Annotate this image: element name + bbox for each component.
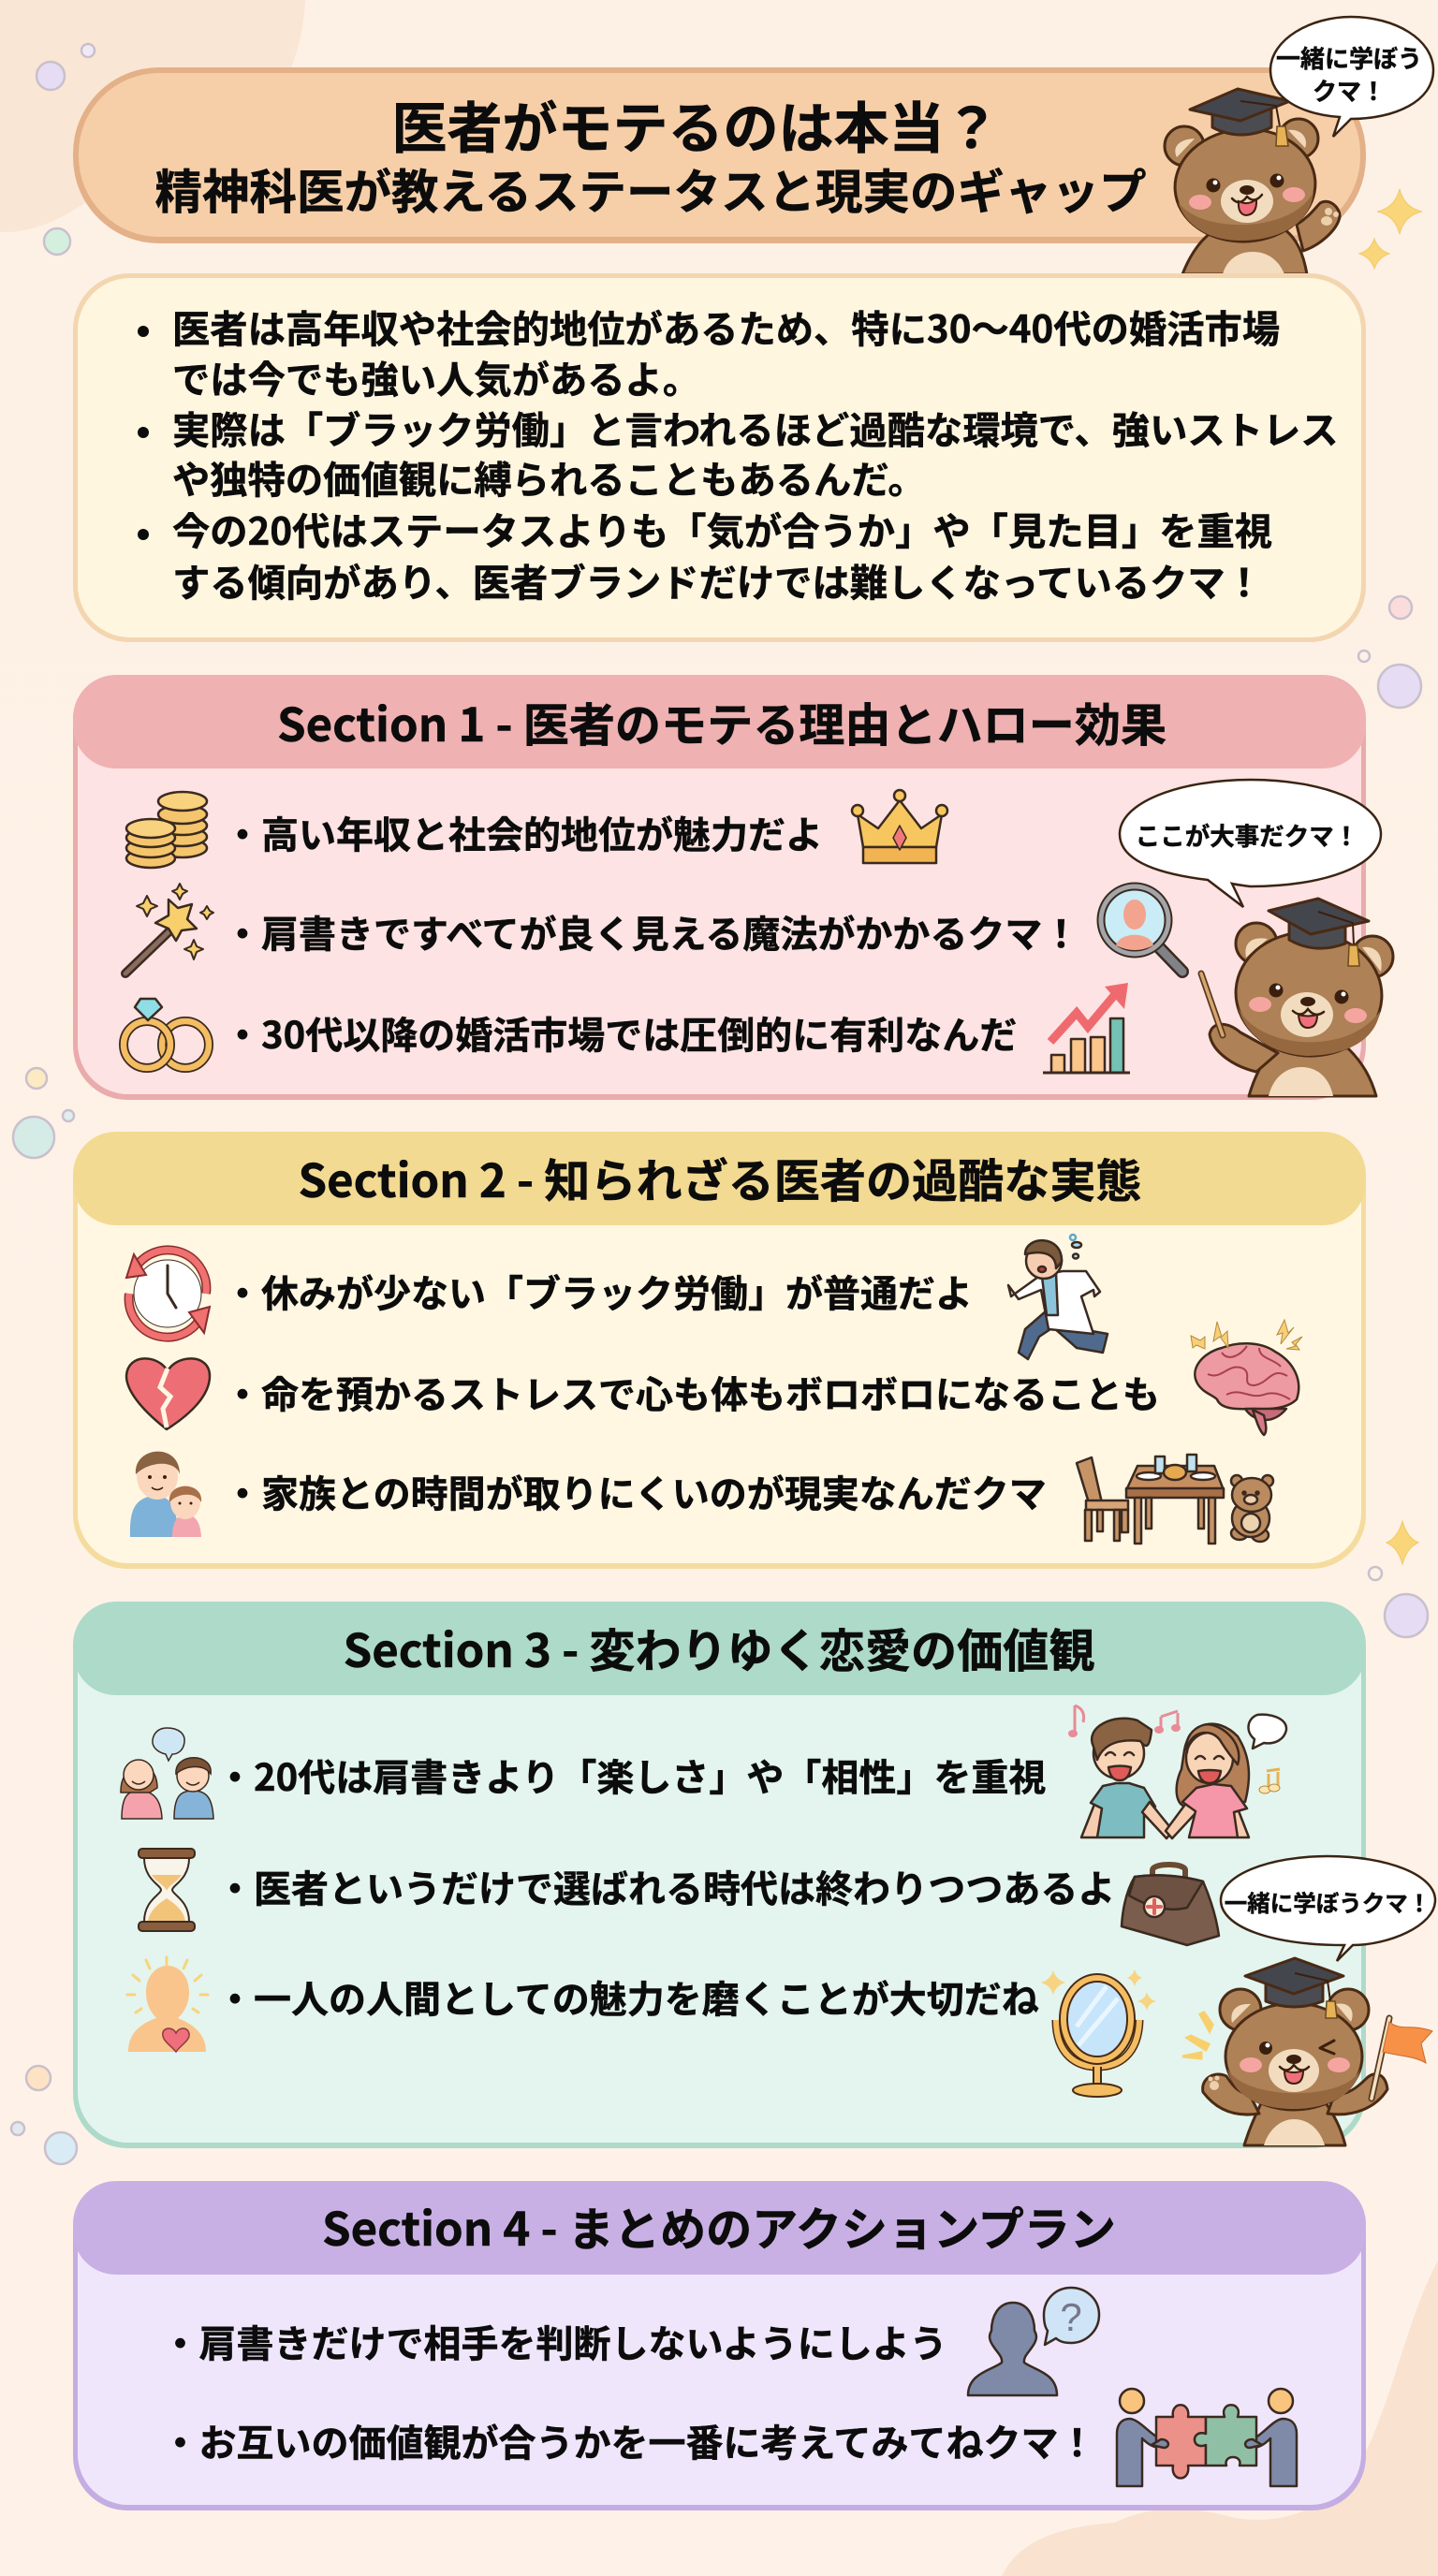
icon: small couple xyxy=(121,1728,213,1819)
section 3 row 3: ・一人の人間としての魅力を磨くことが大切だね xyxy=(216,1969,1039,2024)
section 1 row 2: ・肩書きですべてが良く見える魔法がかかるクマ！ xyxy=(224,904,1079,959)
section 4 heading: Section 4 - まとめのアクションプラン xyxy=(322,2193,1116,2260)
icon: magnifying glass xyxy=(1101,886,1182,972)
bear mascot: waving with cap xyxy=(1165,17,1433,274)
icon: broken heart xyxy=(126,1358,210,1429)
background blob: top left xyxy=(0,0,305,232)
icon: doctor bag xyxy=(1122,1865,1219,1945)
bear mascot: flag xyxy=(1182,1856,1435,2145)
icon: wedding rings xyxy=(124,999,209,1068)
section 1 row 3: ・30代以降の婚活市場では圧倒的に有利なんだ xyxy=(224,1005,1017,1060)
panel: section 3 xyxy=(73,1602,1435,2148)
summary bullets: では今でも強い人気があるよ。 xyxy=(172,349,700,404)
section 3 heading: Section 3 - 変わりゆく恋愛の価値観 xyxy=(344,1615,1094,1681)
section 4 heading xyxy=(73,2181,1366,2275)
summary bullets: する傾向があり、医者ブランドだけでは難しくなっているクマ！ xyxy=(172,552,1263,607)
speech bubble: section 3 xyxy=(1221,1856,1435,1961)
panel: title banner xyxy=(73,67,1366,243)
section 1 row 1: ・高い年収と社会的地位が魅力だよ xyxy=(224,805,823,859)
background blob: bottom right xyxy=(1002,2261,1438,2576)
summary bullets: 医者は高年収や社会的地位があるため、特に30〜40代の婚活市場 xyxy=(172,299,1280,354)
icon: teddy bear xyxy=(1231,1475,1273,1542)
speech bubble: section 3: 一緒に学ぼうクマ！ xyxy=(1225,1886,1431,1919)
title line 2: 精神科医が教えるステータスと現実のギャップ xyxy=(155,154,1146,223)
icon: silhouette with question: ? xyxy=(1060,2295,1082,2339)
speech bubble: section 1: ここが大事だクマ！ xyxy=(1136,816,1358,853)
icon: running doctor xyxy=(1008,1235,1108,1359)
bear mascot: pointer xyxy=(1120,780,1393,1096)
icon: hourglass xyxy=(139,1849,195,1931)
section 2 heading: Section 2 - 知られざる医者の過酷な実態 xyxy=(298,1145,1142,1211)
icon: table and chair xyxy=(1077,1455,1224,1544)
title line 1: 医者がモテるのは本当？ xyxy=(391,84,1000,164)
icon: parent and child xyxy=(130,1452,201,1537)
section 2 row 3: ・家族との時間が取りにくいのが現実なんだクマ xyxy=(224,1464,1047,1518)
section 3 row 1: ・20代は肩書きより「楽しさ」や「相性」を重視 xyxy=(216,1748,1046,1802)
icon: rising chart xyxy=(1043,983,1130,1073)
speech bubble: top: 一緒に学ぼう xyxy=(1276,40,1422,75)
summary bullets: や独特の価値観に縛られることもあるんだ。 xyxy=(172,449,926,505)
panel: section 2 xyxy=(73,1132,1366,1569)
icon: crown xyxy=(852,790,947,863)
speech bubble: top xyxy=(1270,17,1433,137)
panel: section 4 xyxy=(73,2181,1366,2510)
section 4 row 1: ・肩書きだけで相手を判断しないようにしよう xyxy=(161,2314,947,2368)
summary bullets xyxy=(138,299,1339,607)
section 4 row 2: ・お互いの価値観が合うかを一番に考えてみてねクマ！ xyxy=(161,2413,1095,2467)
decorative sparkles xyxy=(1359,189,1422,1564)
panel: section 1 xyxy=(73,675,1393,1100)
panel: summary xyxy=(73,273,1366,642)
summary bullets: 実際は「ブラック労働」と言われるほど過酷な環境で、強いストレス xyxy=(172,400,1339,455)
icon: puzzle handshake xyxy=(1117,2389,1297,2486)
icon: magic wand xyxy=(125,884,213,973)
icon: stressed brain xyxy=(1191,1320,1302,1435)
section 2 heading xyxy=(73,1132,1366,1225)
icon: hand mirror xyxy=(1041,1969,1156,2097)
section 2 row 2: ・命を預かるストレスで心も体もボロボロになることも xyxy=(224,1365,1160,1419)
speech bubble: top: クマ！ xyxy=(1313,73,1386,108)
section 1 heading xyxy=(73,675,1366,768)
icon: silhouette with question xyxy=(968,2288,1099,2395)
icon: happy couple xyxy=(1068,1705,1286,1838)
section 3 heading xyxy=(73,1602,1366,1695)
icon: glowing person xyxy=(127,1957,208,2052)
icon: clock with arrows xyxy=(126,1250,210,1338)
section 1 heading: Section 1 - 医者のモテる理由とハロー効果 xyxy=(277,689,1167,755)
icon: coins xyxy=(126,792,207,868)
section 3 row 2: ・医者というだけで選ばれる時代は終わりつつあるよ xyxy=(216,1859,1115,1913)
summary bullets: 今の20代はステータスよりも「気が合うか」や「見た目」を重視 xyxy=(172,501,1272,556)
section 2 row 1: ・休みが少ない「ブラック労働」が普通だよ xyxy=(224,1264,973,1318)
speech bubble: section 1 xyxy=(1120,780,1381,907)
